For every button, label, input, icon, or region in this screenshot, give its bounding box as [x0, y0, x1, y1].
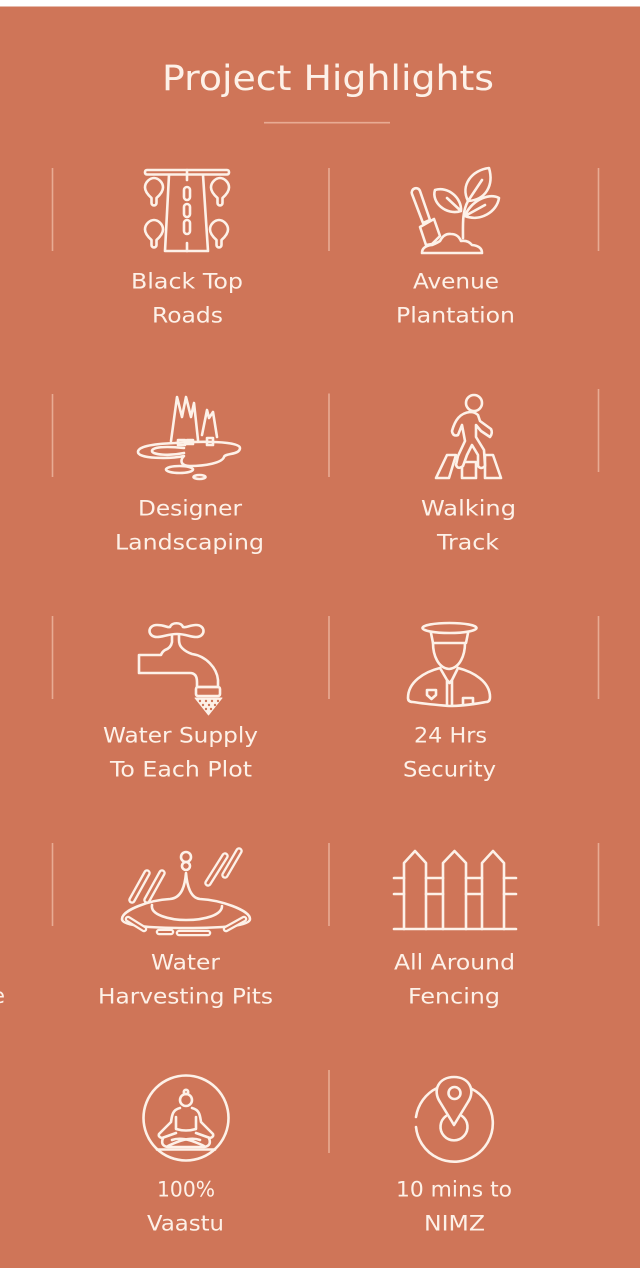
- item: 24 Hrs Security: [403, 623, 496, 782]
- label: 100% Vaastu: [147, 1178, 224, 1236]
- item: Avenue Plantation: [396, 168, 515, 328]
- icon: road with trees: [145, 170, 229, 251]
- heading: Project Highlights: Project Highlights: [162, 59, 494, 99]
- item: Designer Landscaping: [115, 397, 264, 556]
- label: 100% Vaastu: 100%: [157, 1178, 215, 1202]
- label: Walking Track: Walking: [421, 496, 516, 522]
- label: Walking Track: Track: [436, 530, 500, 556]
- icon: fence: [394, 851, 516, 929]
- label: Water Harvesting Pits: Harvesting Pits: [98, 984, 273, 1010]
- icon: rain splash: [122, 851, 250, 933]
- label: 10 mins to NIMZ: [396, 1178, 512, 1236]
- label: Water Supply To Each Plot: [103, 724, 258, 782]
- label: Designer Landscaping: Designer: [138, 496, 242, 522]
- label: 10 mins to NIMZ: NIMZ: [424, 1212, 485, 1236]
- label: Avenue Plantation: [396, 270, 515, 328]
- label: Black Top Roads: Roads: [152, 304, 223, 328]
- label: 24 Hrs Security: Security: [403, 758, 496, 782]
- label: Designer Landscaping: [115, 496, 264, 556]
- icon: pedestrian on crossing: [436, 395, 501, 478]
- label: Water Supply To Each Plot: To Each Plot: [109, 758, 252, 782]
- label: 24 Hrs Security: 24 Hrs: [414, 724, 487, 748]
- label: All Around Fencing: [394, 950, 515, 1010]
- item: Water Harvesting Pits: [98, 851, 273, 1010]
- label: All Around Fencing: Fencing: [408, 984, 500, 1010]
- icon: pond and trees: [138, 397, 240, 479]
- label: Avenue Plantation: Avenue: [413, 270, 499, 294]
- icon: security guard: [408, 623, 490, 706]
- label: Avenue Plantation: Plantation: [396, 304, 515, 328]
- label: Water Harvesting Pits: [98, 950, 273, 1010]
- label: Walking Track: [421, 496, 516, 556]
- label: Water Supply To Each Plot: Water Supply: [103, 724, 258, 748]
- label: Black Top Roads: Black Top: [131, 270, 243, 294]
- label: All Around Fencing: All Around: [394, 950, 515, 976]
- icon: meditating figure in circle: [144, 1076, 228, 1160]
- icon: plant with shovel: [412, 168, 499, 253]
- item: 100% Vaastu: [144, 1076, 228, 1236]
- icon: location pin on circle: [416, 1077, 493, 1162]
- label: Black Top Roads: [131, 270, 243, 328]
- icon: water tap: [139, 623, 222, 715]
- label: 10 mins to NIMZ: 10 mins to: [396, 1178, 512, 1202]
- item: All Around Fencing: [394, 851, 516, 1010]
- item: Water Supply To Each Plot: [103, 623, 258, 782]
- item: 10 mins to NIMZ: [396, 1077, 512, 1236]
- item: Walking Track: [421, 395, 516, 556]
- label: Water Harvesting Pits: Water: [151, 950, 220, 976]
- label: 100% Vaastu: Vaastu: [147, 1212, 224, 1236]
- item: Black Top Roads: [131, 170, 243, 328]
- label: 24 Hrs Security: [403, 724, 496, 782]
- label: Designer Landscaping: Landscaping: [115, 530, 264, 556]
